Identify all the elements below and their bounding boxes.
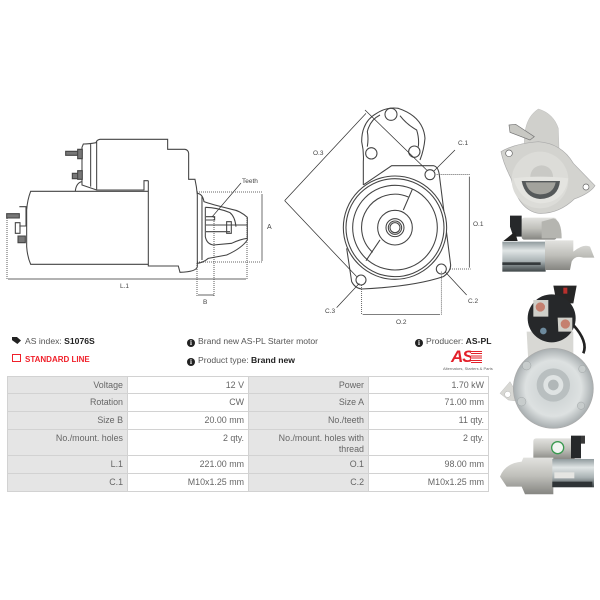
photo: starter side view bottom bbox=[500, 436, 594, 494]
photo: starter rear with solenoid bbox=[500, 286, 593, 428]
specification table: L.1 bbox=[111, 459, 123, 469]
specification table: 2 qty. bbox=[223, 433, 244, 443]
dimension labels bbox=[120, 178, 272, 306]
specification table: C.1 bbox=[109, 477, 123, 487]
motor body bbox=[27, 191, 148, 264]
specification table: 71.00 mm bbox=[445, 397, 484, 407]
specification table: 1.70 kW bbox=[451, 380, 484, 390]
info: standard line: STANDARD LINE bbox=[25, 355, 90, 364]
specification table: O.1 bbox=[350, 459, 364, 469]
specification table: Rotation bbox=[90, 397, 123, 407]
specification table bbox=[7, 376, 489, 492]
top mount bbox=[362, 108, 425, 185]
specification table: Voltage bbox=[93, 380, 123, 390]
specification table: CW bbox=[229, 397, 244, 407]
info: producer: Producer: AS-PL bbox=[426, 336, 491, 346]
specification table: M10x1.25 mm bbox=[188, 477, 244, 487]
specification table: Size A bbox=[339, 397, 364, 407]
dimension labels: Teeth bbox=[242, 178, 258, 185]
logo: AS-PL: Alternators, Starters & Parts bbox=[443, 366, 493, 371]
mount holes bbox=[356, 108, 446, 285]
terminals bbox=[66, 149, 82, 179]
photo: starter side view top bbox=[502, 216, 594, 272]
specification table: 2 qty. bbox=[463, 433, 484, 443]
specification table: 221.00 mm bbox=[200, 459, 244, 469]
front view dimensions bbox=[285, 110, 471, 315]
front view labels: O.1 bbox=[473, 221, 484, 228]
dimension labels: A bbox=[267, 224, 272, 231]
info: product type: i bbox=[190, 358, 192, 366]
front view labels: O.3 bbox=[313, 150, 324, 157]
side view drawing bbox=[7, 139, 247, 272]
specification table: Size B bbox=[97, 415, 123, 425]
specification table: No./teeth bbox=[328, 415, 364, 425]
info: AS index: AS index: S1076S bbox=[25, 336, 95, 346]
specification table: 20.00 mm bbox=[205, 415, 244, 425]
front view drawing bbox=[285, 108, 471, 315]
end plate rings bbox=[343, 176, 447, 279]
info: product type: Product type: Brand new bbox=[198, 355, 295, 365]
info: producer: i bbox=[418, 339, 420, 347]
logo: AS-PL bbox=[443, 347, 493, 371]
side view dimensions bbox=[7, 178, 272, 306]
specification table: 11 qty. bbox=[459, 415, 484, 425]
front view labels bbox=[313, 140, 484, 326]
dimension labels: B bbox=[203, 299, 207, 306]
front view labels: C.2 bbox=[468, 298, 478, 305]
front view labels: O.2 bbox=[396, 319, 407, 326]
logo: AS-PL: AS bbox=[451, 347, 473, 366]
info: brand new: Brand new AS-PL Starter motor bbox=[198, 336, 318, 346]
dimension labels: L.1 bbox=[120, 283, 129, 290]
solenoid bbox=[75, 139, 148, 191]
specification table: No./mount. holes with bbox=[279, 433, 364, 443]
drive housing bbox=[144, 139, 197, 272]
front view labels: C.3 bbox=[325, 308, 336, 315]
specification table: 12 V bbox=[226, 380, 244, 390]
specification table: M10x1.25 mm bbox=[428, 477, 484, 487]
flange outline bbox=[347, 166, 451, 289]
specification table: C.2 bbox=[350, 477, 364, 487]
nose bbox=[197, 193, 247, 263]
specification table: 98.00 mm bbox=[445, 459, 484, 469]
specification table: No./mount. holes bbox=[56, 433, 123, 443]
specification table: Power bbox=[339, 380, 364, 390]
front view labels: C.1 bbox=[458, 140, 468, 147]
info: brand new: i bbox=[190, 339, 192, 347]
rear terminals bbox=[7, 214, 25, 243]
photo: starter front flange bbox=[501, 109, 595, 213]
specification table: thread bbox=[339, 444, 364, 454]
